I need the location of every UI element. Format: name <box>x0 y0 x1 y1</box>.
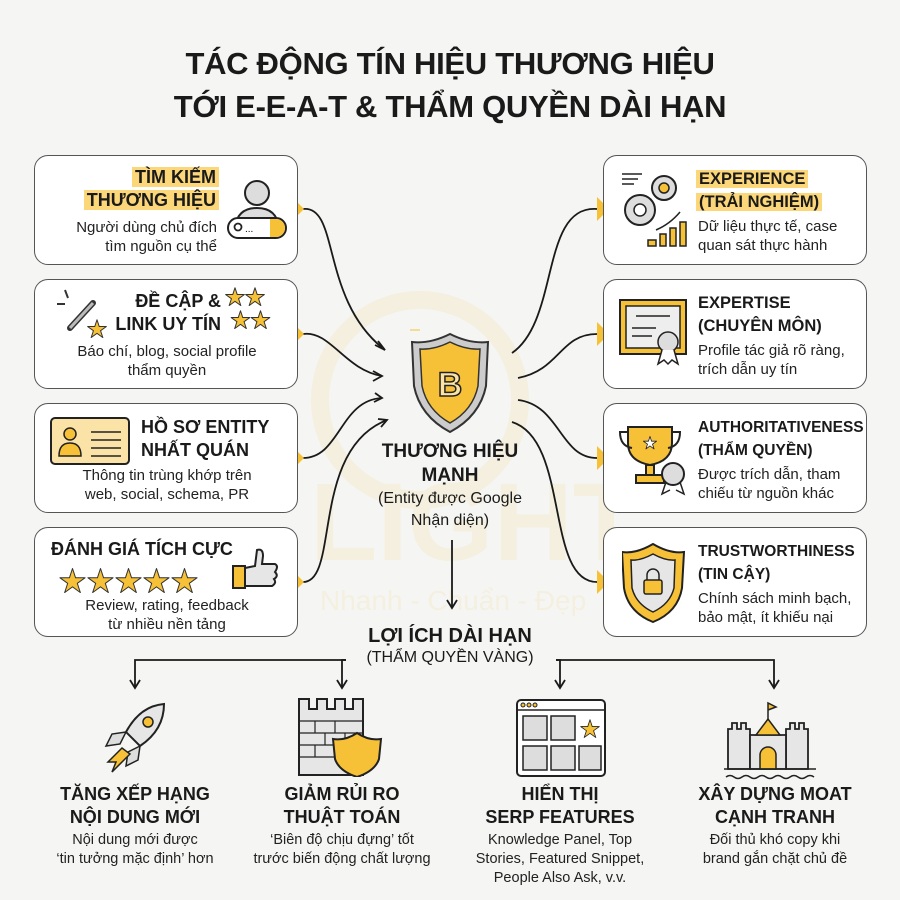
text: authoritativeness <box>698 466 840 502</box>
heading: entity <box>141 416 269 460</box>
heading: expertise <box>698 294 822 335</box>
icon: thumbs up <box>232 548 278 589</box>
text: Nội dung mới được <box>72 832 198 848</box>
text: Stories, Featured Snippet, <box>476 851 644 867</box>
heading: reviews: ĐÁNH GIÁ TÍCH CỰC <box>51 539 233 559</box>
heading: brand search <box>84 166 219 210</box>
benefit: moat <box>698 783 852 867</box>
icon: serp window <box>516 699 606 777</box>
icon: chain link <box>57 290 96 331</box>
icon: central shield: B <box>438 366 462 404</box>
icon: five stars: ★★★★★ <box>59 567 199 597</box>
icon: serp window: ★ <box>580 719 600 741</box>
text: entity <box>82 467 252 503</box>
text: authoritativeness: Được trích dẫn, tham <box>698 466 840 483</box>
heading: trustworthiness <box>698 543 855 583</box>
text: strong brand <box>378 440 522 529</box>
text: brand search <box>76 219 217 255</box>
icon: wall shield <box>298 698 382 777</box>
text: experience: quan sát thực hành <box>698 237 827 254</box>
title: TÁC ĐỘNG TÍN HIỆU THƯƠNG HIỆU <box>185 46 715 81</box>
heading: mentions: LINK UY TÍN <box>115 314 221 334</box>
benefit: algorithm risk <box>253 783 431 867</box>
text: expertise: trích dẫn uy tín <box>698 361 797 378</box>
heading: entity: NHẤT QUÁN <box>141 440 249 460</box>
text: Knowledge Panel, Top <box>488 832 632 848</box>
heading: long-term benefits: LỢI ÍCH DÀI HẠN <box>368 625 532 647</box>
icon: gears chart <box>622 173 687 247</box>
heading: entity: HỒ SƠ ENTITY <box>141 417 269 437</box>
heading: long-term benefits: (THẨM QUYỀN VÀNG) <box>366 649 534 666</box>
heading: expertise: EXPERTISE <box>698 294 791 312</box>
text: brand search: Người dùng chủ đích <box>76 219 217 236</box>
watermark: Nhanh - Chuẩn - Đẹp <box>320 585 586 616</box>
heading: experience <box>696 170 822 211</box>
panel: trustworthiness <box>603 527 867 637</box>
text: SERP FEATURES <box>485 807 635 827</box>
icon: lock shield <box>622 542 686 624</box>
text: GIẢM RỦI RO <box>284 784 400 804</box>
panel: entity profile <box>34 403 298 513</box>
text: brand search: tìm nguồn cụ thể <box>105 238 217 255</box>
text: reviews <box>85 597 249 633</box>
heading: authoritativeness: AUTHORITATIVENESS <box>698 419 864 436</box>
panel: mentions & links <box>34 279 298 389</box>
heading: brand search: THƯƠNG HIỆU <box>87 190 216 210</box>
text: experience: Dữ liệu thực tế, case <box>698 218 837 235</box>
icon: user search: ... <box>245 224 253 235</box>
heading: authoritativeness <box>698 419 864 459</box>
text: trước biến động chất lượng <box>253 851 431 867</box>
heading: mentions: ĐỀ CẬP & <box>135 291 221 311</box>
heading: experience: EXPERIENCE <box>699 170 805 188</box>
icon: castle <box>724 702 816 780</box>
icon: stars: ★★ <box>231 310 271 332</box>
text: experience <box>698 218 837 254</box>
text: trustworthiness: bảo mật, ít khiếu nại <box>698 609 833 626</box>
text: strong brand: THƯƠNG HIỆU <box>382 441 518 462</box>
panel: positive reviews <box>34 527 298 637</box>
text: strong brand: Nhận diện) <box>411 512 489 529</box>
text: People Also Ask, v.v. <box>494 870 626 886</box>
heading: authoritativeness: (THẨM QUYỀN) <box>698 442 813 459</box>
text: expertise: Profile tác giả rõ ràng, <box>698 342 845 359</box>
panel: mentions & links: ★ <box>87 319 107 341</box>
text: strong brand: (Entity được Google <box>378 490 522 507</box>
icon: trophy <box>619 426 686 496</box>
heading: mentions <box>115 290 221 334</box>
text: reviews: Review, rating, feedback <box>85 597 249 614</box>
benefit: rankings <box>56 784 214 867</box>
text: ‘Biên độ chịu đựng’ tốt <box>270 832 414 848</box>
text: THUẬT TOÁN <box>284 807 400 827</box>
icon: certificate <box>619 299 687 366</box>
text: trustworthiness: Chính sách minh bạch, <box>698 590 851 607</box>
text: XÂY DỰNG MOAT <box>698 784 852 804</box>
benefit: serp features <box>476 784 644 886</box>
text: mentions <box>77 343 257 379</box>
text: CẠNH TRANH <box>715 807 835 827</box>
text: Đối thủ khó copy khi <box>710 832 840 848</box>
heading: brand search: TÌM KIẾM <box>135 167 216 187</box>
heading: trustworthiness: TRUSTWORTHINESS <box>698 543 855 560</box>
icon: central shield <box>410 330 490 434</box>
title <box>174 46 726 124</box>
text: NỘI DUNG MỚI <box>70 807 200 827</box>
panel: expertise <box>603 279 867 389</box>
text: brand gắn chặt chủ đề <box>703 851 847 867</box>
icon: rocket <box>104 702 165 772</box>
text: strong brand: MẠNH <box>422 465 478 486</box>
panel: authoritativeness <box>603 403 867 513</box>
text: TĂNG XẾP HẠNG <box>60 784 210 804</box>
panel: experience <box>603 155 867 265</box>
heading: experience: (TRẢI NGHIỆM) <box>699 193 819 211</box>
panel: brand search <box>34 155 298 265</box>
heading: trustworthiness: (TIN CẬY) <box>698 566 770 583</box>
watermark <box>310 291 620 616</box>
text: authoritativeness: chiếu từ nguồn khác <box>698 485 834 502</box>
icon: stars: ★★ <box>225 287 265 309</box>
title: TỚI E-E-A-T & THẨM QUYỀN DÀI HẠN <box>174 89 726 124</box>
icon: user search <box>227 180 287 239</box>
heading: expertise: (CHUYÊN MÔN) <box>698 317 822 335</box>
icon: stars <box>225 287 271 332</box>
text: HIỂN THỊ <box>521 784 598 804</box>
heading: long-term benefits <box>366 624 534 666</box>
text: mentions: Báo chí, blog, social profile <box>77 343 257 360</box>
text: entity: web, social, schema, PR <box>85 486 249 503</box>
text: reviews: từ nhiều nền tảng <box>108 616 226 633</box>
text: trustworthiness <box>698 590 851 626</box>
text: expertise <box>698 342 845 378</box>
icon: id card <box>50 417 130 465</box>
icon: trophy: ★ <box>643 435 657 451</box>
text: ‘tin tưởng mặc định’ hơn <box>56 851 214 867</box>
text: entity: Thông tin trùng khớp trên <box>82 467 252 484</box>
text: mentions: thẩm quyền <box>128 362 206 379</box>
